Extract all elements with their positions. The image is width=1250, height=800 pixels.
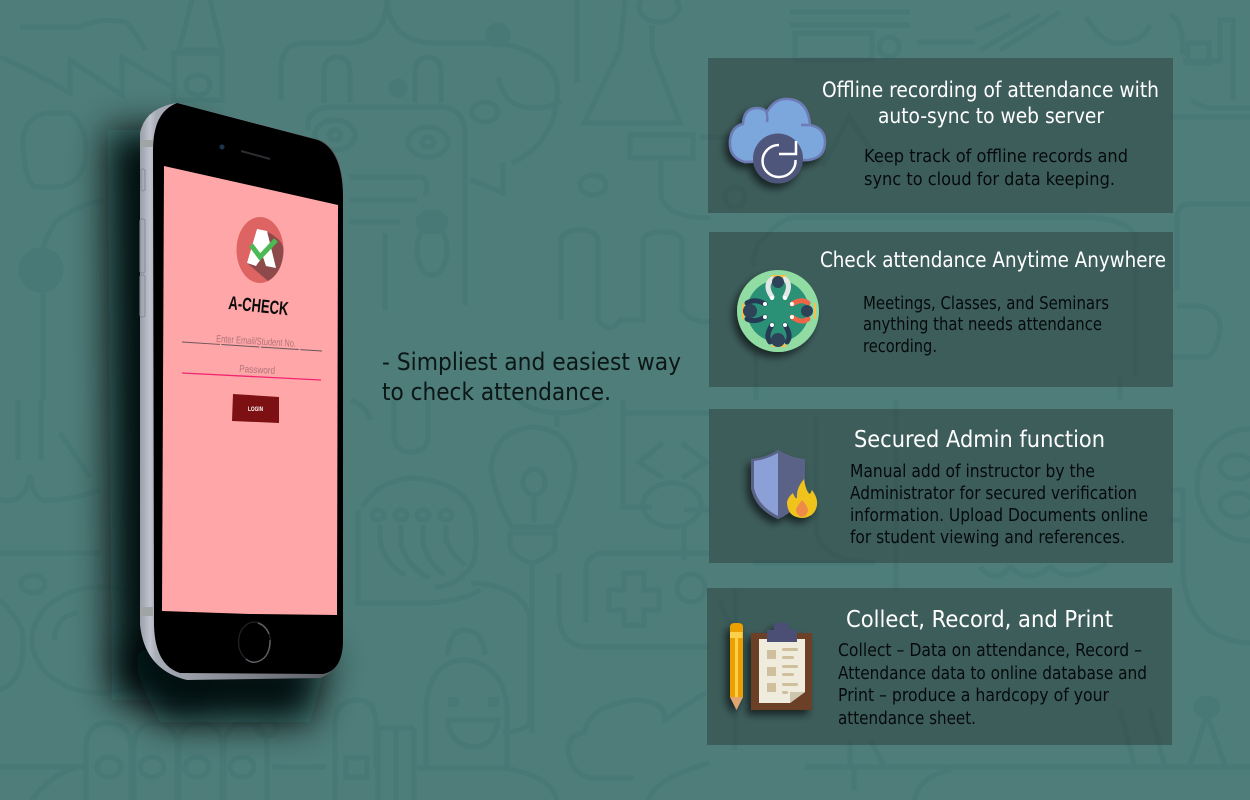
panel body: Manual add of instructor by the (850, 462, 1095, 482)
side buttons (140, 169, 145, 317)
phone front glass (153, 103, 343, 674)
panel body (863, 294, 1109, 357)
password field: Password (239, 364, 275, 377)
panel body: attendance sheet. (838, 709, 976, 729)
panel body: Meetings, Classes, and Seminars (863, 294, 1109, 314)
panel body: Print – produce a hardcopy of your (838, 686, 1110, 706)
tagline: to check attendance. (382, 378, 611, 406)
phone body (140, 103, 343, 680)
login screen (162, 166, 338, 615)
panel body: information. Upload Documents online (850, 506, 1148, 526)
icon: meeting table (737, 270, 819, 352)
panel body: recording. (863, 337, 937, 357)
panel body: Administrator for secured verification (850, 484, 1137, 504)
phone mockup (140, 103, 343, 680)
panel body: Keep track of offline records and (864, 147, 1128, 167)
front camera (220, 144, 224, 150)
panel: secured admin (709, 409, 1173, 563)
tagline: - Simpliest and easiest way (382, 348, 681, 376)
panel body: Collect – Data on attendance, Record – (838, 641, 1142, 661)
panel body: anything that needs attendance (863, 315, 1102, 335)
panel: check attendance (709, 232, 1173, 387)
password field (182, 364, 321, 380)
panel heading: Offline recording of attendance with (822, 78, 1159, 102)
panel body (838, 641, 1147, 729)
panel heading (822, 78, 1159, 128)
A-Check logo (236, 217, 284, 283)
panel: offline recording (708, 58, 1173, 213)
panel body: for student viewing and references. (850, 528, 1125, 548)
home button (238, 622, 270, 662)
app name: A-CHECK (227, 293, 290, 320)
panel heading: auto-sync to web server (878, 104, 1104, 128)
panel heading: Collect, Record, and Print (846, 607, 1113, 633)
panel: collect record print (707, 588, 1172, 745)
antenna bands (140, 140, 153, 616)
tagline (382, 348, 681, 406)
phone shadow (108, 130, 330, 722)
panel body (850, 462, 1148, 548)
panel heading: Secured Admin function (854, 427, 1105, 453)
icon: pencil and clipboard (730, 623, 812, 710)
panel body (864, 147, 1128, 190)
icon: shield with flame (752, 451, 817, 518)
icon: cloud sync (730, 99, 825, 184)
panel body: Attendance data to online database and (838, 664, 1147, 684)
login button (232, 394, 279, 423)
panel heading: Check attendance Anytime Anywhere (820, 248, 1166, 272)
panel body: sync to cloud for data keeping. (864, 170, 1115, 190)
email field: Enter Email/Student No. (216, 334, 296, 350)
login button: LOGIN (248, 406, 263, 413)
speaker (241, 151, 270, 159)
